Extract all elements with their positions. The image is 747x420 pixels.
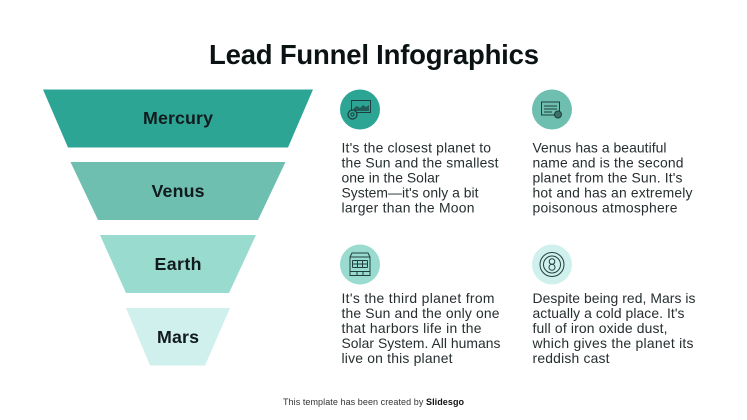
- funnel: [43, 90, 313, 366]
- icon: chart presentation with gear: [340, 90, 380, 130]
- text block: Mercury: larger than the Moon: [342, 200, 474, 216]
- text block: Venus: name and is the second: [532, 154, 684, 170]
- text block: Venus: planet from the Sun. It's: [532, 170, 683, 186]
- text block: Mercury: It's the closest planet to: [342, 140, 491, 156]
- text block: Mercury: System—it's only a bit: [342, 184, 479, 200]
- funnel tier: Earth: [100, 235, 256, 293]
- funnel tier: Venus: Venus: [152, 181, 205, 201]
- panel: Mercury: [340, 90, 499, 216]
- text block: Earth: the Sun and the only one: [342, 305, 500, 321]
- text block: Earth: It's the third planet from: [342, 290, 494, 306]
- funnel tier: Venus: [70, 162, 286, 220]
- funnel tier: Mars: Mars: [157, 327, 199, 347]
- funnel tier: Mars: [126, 308, 230, 366]
- text block: Mars: actually a cold place. It's: [532, 305, 685, 321]
- text block: Mercury: one in the Solar: [342, 170, 440, 186]
- text block: Mars: [532, 290, 696, 366]
- text block: Venus: poisonous atmosphere: [532, 200, 678, 216]
- panel: Earth: [340, 244, 501, 366]
- title: Lead Funnel Infographics: [209, 39, 539, 70]
- text block: Venus: [532, 140, 693, 216]
- footer credit: This template has been created by Slidesgo: [283, 397, 464, 407]
- funnel tier: Mercury: [43, 90, 313, 148]
- text block: Venus: Venus has a beautiful: [532, 140, 666, 156]
- icon: certificate: [532, 90, 572, 130]
- icon: coin seal: [532, 244, 572, 284]
- text block: Venus: hot and has an extremely: [532, 184, 693, 200]
- text block: Mars: Despite being red, Mars is: [532, 290, 696, 306]
- funnel tier: Earth: Earth: [154, 254, 202, 274]
- icon: building: [340, 244, 380, 284]
- text block: Earth: live on this planet: [342, 350, 453, 366]
- text block: Mercury: [342, 140, 499, 216]
- text block: Mars: full of iron oxide dust,: [532, 320, 668, 336]
- text block: Earth: [342, 290, 501, 366]
- text block: Earth: Solar System. All humans: [342, 335, 501, 351]
- panel: Mars: [532, 244, 696, 366]
- funnel tier: Mercury: Mercury: [143, 108, 213, 128]
- text block: Mars: which gives the planet its: [532, 335, 694, 351]
- text block: Mercury: the Sun and the smallest: [342, 154, 499, 170]
- text block: Mars: reddish cast: [532, 350, 610, 366]
- panel: Venus: [532, 90, 693, 216]
- text block: Earth: that harbors life in the: [342, 320, 482, 336]
